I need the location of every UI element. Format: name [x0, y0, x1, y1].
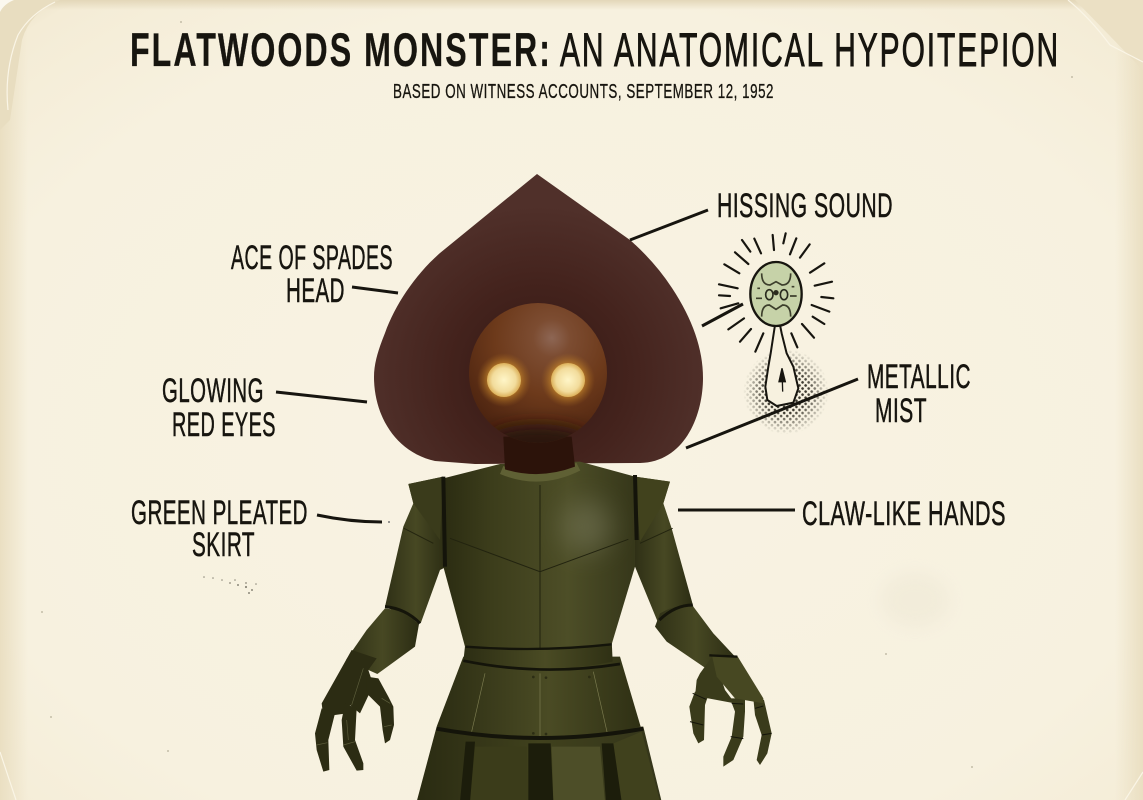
label: glowing red eyes: GLOWING [162, 372, 264, 410]
subtitle: BASED ON WITNESS ACCOUNTS, SEPTEMBER 12, 1952 [393, 81, 774, 103]
spade-shaped head shield [374, 174, 703, 464]
faint halftone speck [203, 576, 257, 594]
torso chest plate [443, 462, 637, 649]
label: glowing red eyes: RED EYES [172, 406, 276, 444]
halftone mist [743, 349, 829, 434]
right eye [541, 353, 595, 407]
label: ace of spades head: ACE OF SPADES [231, 239, 393, 277]
label: ace of spades head: HEAD [286, 272, 345, 310]
label: metallic mist: MIST [875, 392, 927, 430]
peplum [437, 657, 643, 739]
label: green pleated skirt [131, 494, 390, 564]
title: FLATWOODS MONSTER: [130, 23, 552, 76]
mist plume with arrow [765, 325, 798, 406]
label: hissing sound [630, 187, 893, 240]
label: hissing sound: HISSING SOUND [717, 187, 893, 225]
armoured body [346, 437, 737, 800]
emblem sketch: glowing orb and mist [719, 233, 833, 434]
leader line: orb [702, 304, 743, 326]
label: ace of spades head [231, 239, 398, 310]
skirt [417, 727, 662, 800]
label: claw-like hands: CLAW-LIKE HANDS [802, 495, 1006, 533]
label: metallic mist: METALLIC [867, 358, 971, 396]
left claw hand [315, 650, 394, 772]
rays [719, 233, 833, 352]
belt [463, 640, 620, 670]
label: green pleated skirt: GREEN PLEATED [131, 494, 308, 532]
left eye [477, 353, 531, 407]
title [130, 23, 1060, 76]
label: glowing red eyes [162, 372, 367, 444]
collar and neck [502, 437, 578, 477]
label: metallic mist [686, 358, 971, 448]
monster figure [131, 174, 1006, 800]
label: green pleated skirt: SKIRT [192, 526, 255, 564]
right arm [635, 477, 737, 670]
left arm [346, 477, 447, 674]
right claw hand [689, 654, 772, 767]
orb [750, 262, 802, 326]
round head with glowing eyes [469, 303, 607, 440]
